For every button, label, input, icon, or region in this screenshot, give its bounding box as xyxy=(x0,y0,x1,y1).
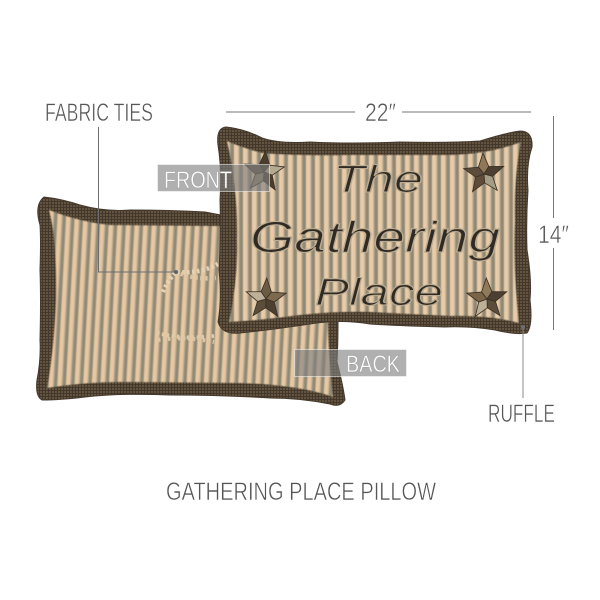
label: front xyxy=(158,164,270,194)
fabric ties lower xyxy=(157,333,214,342)
star: top left xyxy=(243,150,285,190)
label: fabric ties: FABRIC TIES xyxy=(45,99,153,127)
star: bottom right xyxy=(466,277,508,317)
fabric ties upper xyxy=(163,264,218,292)
label: back: BACK xyxy=(346,351,400,378)
back pillow xyxy=(37,197,345,405)
back pillow ruffle xyxy=(37,197,345,405)
back pillow striped panel xyxy=(47,210,333,397)
caption: GATHERING PLACE PILLOW xyxy=(166,478,436,506)
dimension: height 14 inches: 14″ xyxy=(538,221,569,249)
front pillow ruffle xyxy=(218,127,532,334)
star: bottom left xyxy=(245,277,287,317)
dimension: width 22 inches: 22″ xyxy=(365,99,396,127)
leader: ruffle xyxy=(521,325,525,398)
leader: fabric ties xyxy=(98,127,178,274)
pillow title: Place: Place xyxy=(315,272,443,314)
front pillow striped panel xyxy=(227,141,521,323)
label: ruffle: RUFFLE xyxy=(488,400,555,428)
star: top right xyxy=(463,152,505,192)
pillow title: Gathering: Gathering xyxy=(250,213,501,262)
front pillow xyxy=(218,127,532,334)
label: front: FRONT xyxy=(164,167,232,194)
pillow title: The: The xyxy=(333,159,423,201)
label: back xyxy=(294,350,406,378)
